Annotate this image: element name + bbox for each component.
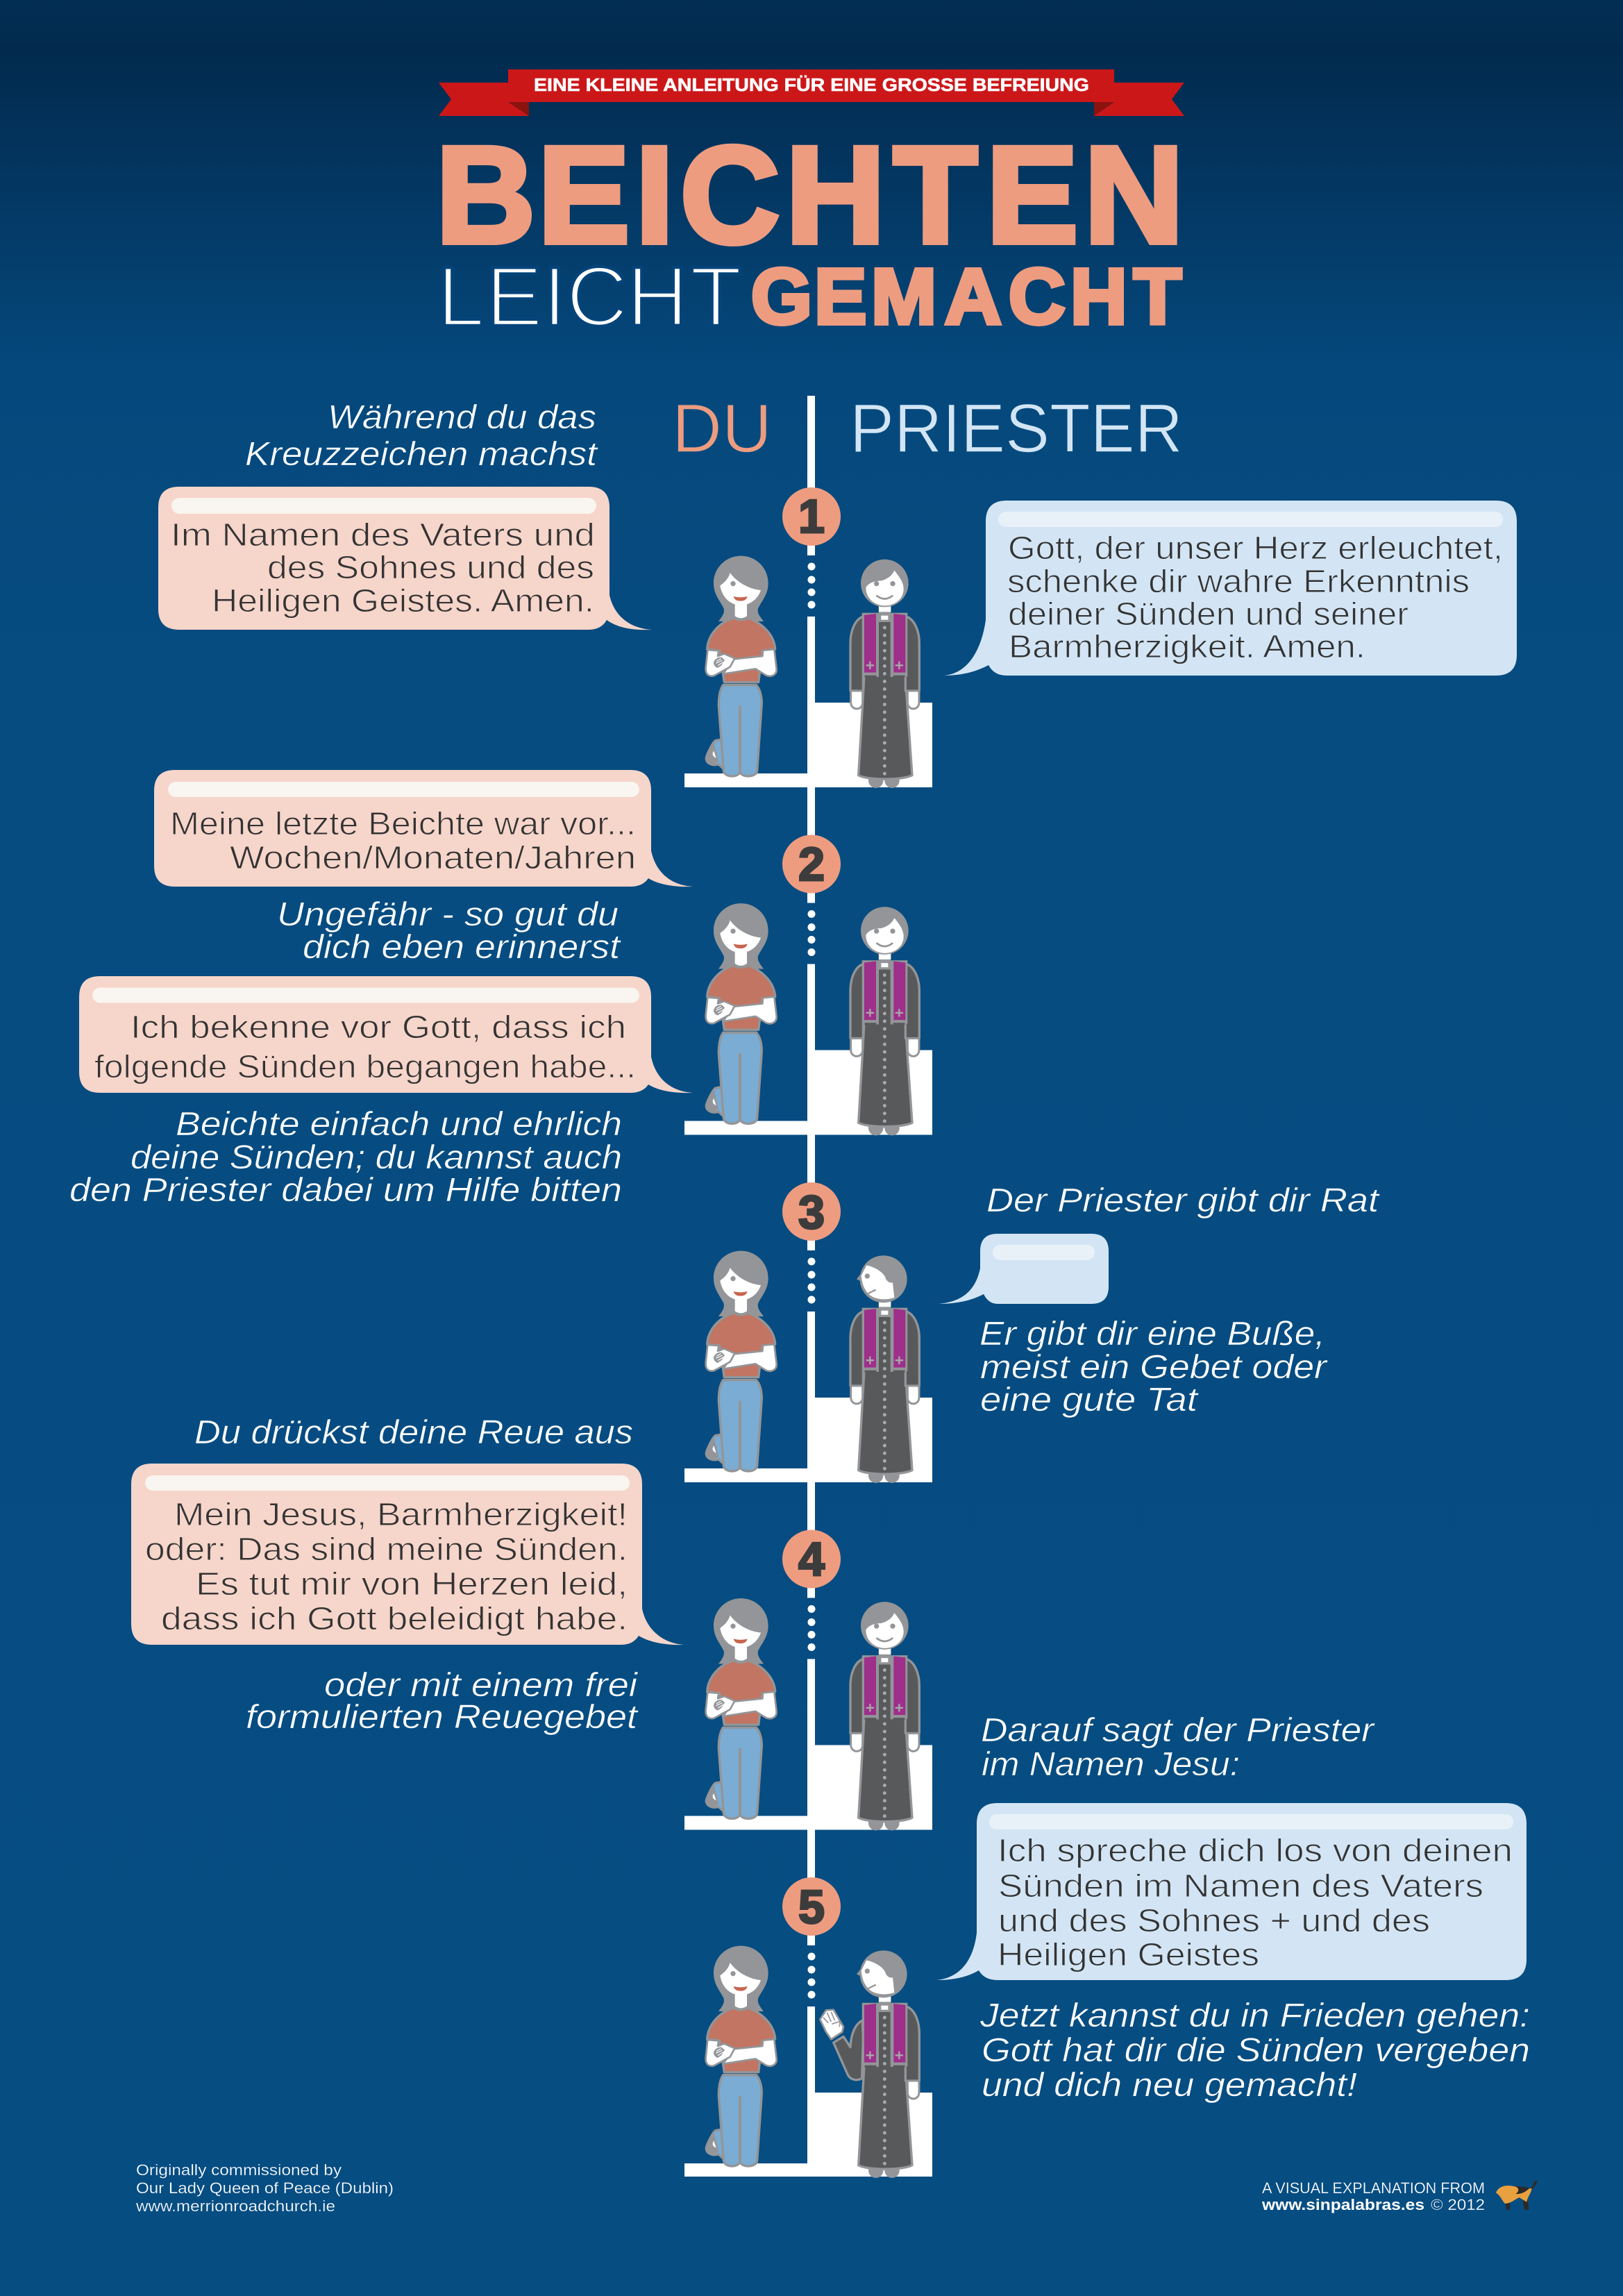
step 2 (684, 835, 932, 1135)
number badge 5: 5 (798, 1881, 825, 1934)
note: approximately: dich eben erinnerst (303, 929, 621, 966)
number badge 3 (782, 1182, 841, 1241)
step 3 (684, 1182, 932, 1483)
footer credit: sinpalabras (1261, 2179, 1485, 2213)
speech bubble: priest step 1: deiner Sünden und seiner (1008, 596, 1408, 632)
speech bubble: penitent step 1: Im Namen des Vaters und (171, 517, 595, 553)
note: go in peace: Gott hat dir die Sünden vergeben (982, 2032, 1530, 2069)
ribbon banner: EINE KLEINE ANLEITUNG FÜR EINE GROSSE BEFREIUNG (534, 74, 1089, 95)
footer credit: commission: Originally commissioned by (136, 2161, 342, 2179)
speech bubble: contrition: oder: Das sind meine Sünden. (145, 1531, 628, 1567)
dots: step 2 (808, 910, 815, 956)
speech bubble: priest step 1: schenke dir wahre Erkenntnis (1007, 563, 1470, 599)
speech bubble: contrition: dass ich Gott beleidigt habe. (161, 1600, 628, 1636)
number badge 2 (782, 835, 841, 893)
figure: priest, step 4 (850, 1602, 919, 1830)
speech bubble: last confession: Meine letzte Beichte war vor... (170, 805, 636, 841)
note: then the priest says: im Namen Jesu: (982, 1746, 1240, 1783)
note: penance: meist ein Gebet oder (980, 1349, 1328, 1386)
dots: step 4 (808, 1605, 815, 1651)
figure: penitent, step 4 (706, 1598, 777, 1818)
speech bubble: confession of sins: folgende Sünden begangen habe... (94, 1048, 636, 1084)
note: then the priest says (981, 1712, 1375, 1783)
speech bubble: absolution: Ich spreche dich los von deinen (998, 1832, 1513, 1868)
footer credit: commission: Our Lady Queen of Peace (Dublin) (136, 2179, 394, 2197)
note: sign of the cross (245, 399, 598, 473)
number badge 5 (782, 1877, 841, 1936)
speech bubble: contrition: Mein Jesus, Barmherzigkeit! (174, 1496, 628, 1532)
figure: priest, step 1 (850, 560, 919, 788)
note: approximately (277, 896, 621, 966)
title: LEICHT: LEICHT (437, 249, 742, 344)
speech bubble: empty priest step 3 (939, 1234, 1109, 1304)
figure: priest, step 2 (850, 907, 919, 1135)
figure: penitent, step 2 (706, 903, 777, 1123)
speech bubble: last confession: Wochen/Monaten/Jahren (230, 839, 636, 875)
speech bubble: priest step 1 (944, 501, 1517, 676)
dots: step 3 (808, 1258, 815, 1304)
note: go in peace (979, 1997, 1530, 2104)
speech bubble: penitent step 1: Heiligen Geistes. Amen. (212, 583, 594, 619)
note: penance: eine gute Tat (980, 1382, 1199, 1418)
speech bubble: absolution (936, 1803, 1527, 1980)
footer credit: sinpalabras: A VISUAL EXPLANATION FROM (1262, 2179, 1485, 2197)
stage: step 5 (684, 2093, 932, 2177)
stage: step 1 (684, 703, 932, 787)
speech bubble: penitent step 1 (158, 487, 652, 630)
number badge 1: 1 (798, 490, 825, 543)
number badge 4 (782, 1530, 841, 1589)
stage: step 3 (684, 1398, 932, 1482)
figure: priest blessing, step 5 (820, 1950, 919, 2178)
speech bubble: last confession (154, 770, 693, 887)
column heading: DU: DU (672, 389, 772, 467)
speech bubble: priest step 1: Barmherzigkeit. Amen. (1009, 628, 1365, 664)
stage: step 2 (684, 1050, 932, 1134)
number badge 4: 4 (798, 1533, 825, 1586)
step 1 (684, 487, 932, 788)
footer credit: sinpalabras: © 2012 (1431, 2196, 1485, 2213)
figure: penitent, step 1 (706, 556, 777, 776)
note: approximately: Ungefähr - so gut du (277, 896, 619, 933)
speech bubble: confession of sins: Ich bekenne vor Gott, dass ich (131, 1009, 626, 1045)
step 5 (684, 1877, 932, 2178)
title: GEMACHT: GEMACHT (751, 253, 1181, 340)
number badge 2: 2 (798, 838, 825, 891)
footer credit: commission: www.merrionroadchurch.ie (135, 2197, 335, 2215)
stage: step 4 (684, 1745, 932, 1830)
step 4 (684, 1530, 932, 1830)
figure: penitent, step 5 (706, 1946, 777, 2166)
note: free prayer: oder mit einem frei (324, 1667, 639, 1704)
note: sign of the cross: Kreuzzeichen machst (245, 436, 598, 473)
ribbon banner (439, 69, 1184, 116)
icon: bison (1496, 2181, 1538, 2210)
column heading: PRIESTER: PRIESTER (850, 389, 1183, 467)
speech bubble: confession of sins (79, 976, 693, 1093)
speech bubble: absolution: und des Sohnes + und des (998, 1902, 1430, 1938)
dots: step 5 (808, 1952, 815, 1998)
note: confess honestly: deine Sünden; du kannst auch (131, 1139, 622, 1176)
speech bubble: contrition: Es tut mir von Herzen leid, (196, 1566, 628, 1602)
speech bubble: absolution: Sünden im Namen des Vaters (998, 1868, 1483, 1904)
figure: priest in profile, step 3 (850, 1255, 919, 1483)
number badge 3: 3 (798, 1186, 825, 1239)
number badge 1 (782, 487, 841, 546)
speech bubble: absolution: Heiligen Geistes (998, 1936, 1259, 1972)
note: confess honestly (69, 1106, 622, 1209)
note: penance (979, 1316, 1328, 1418)
central timeline (807, 396, 815, 2163)
note: confess honestly: den Priester dabei um Hilfe bitten (69, 1172, 622, 1209)
speech bubble: priest step 1: Gott, der unser Herz erleuchtet, (1008, 530, 1503, 566)
dots: step 1 (808, 562, 815, 608)
title: BEICHTEN: BEICHTEN (436, 118, 1184, 271)
footer credit: sinpalabras: www.sinpalabras.es (1261, 2196, 1424, 2213)
note: sign of the cross: Während du das (328, 399, 596, 436)
speech bubble: contrition (131, 1464, 684, 1645)
note: free prayer: formulierten Reuegebet (246, 1699, 639, 1736)
note: free prayer (246, 1667, 639, 1736)
note: go in peace: und dich neu gemacht! (982, 2067, 1357, 2104)
note: go in peace: Jetzt kannst du in Frieden gehen: (979, 1997, 1530, 2034)
speech bubble: penitent step 1: des Sohnes und des (267, 549, 594, 585)
note: confess honestly: Beichte einfach und ehrlich (176, 1106, 622, 1143)
figure: penitent, step 3 (706, 1251, 777, 1471)
title block (436, 69, 1184, 344)
note: penance: Er gibt dir eine Buße, (979, 1316, 1325, 1352)
note: express contrition: Du drückst deine Reue aus (194, 1414, 633, 1451)
note: priest gives advice: Der Priester gibt dir Rat (986, 1182, 1380, 1219)
note: then the priest says: Darauf sagt der Priester (981, 1712, 1375, 1749)
footer credit: commission (135, 2161, 394, 2215)
